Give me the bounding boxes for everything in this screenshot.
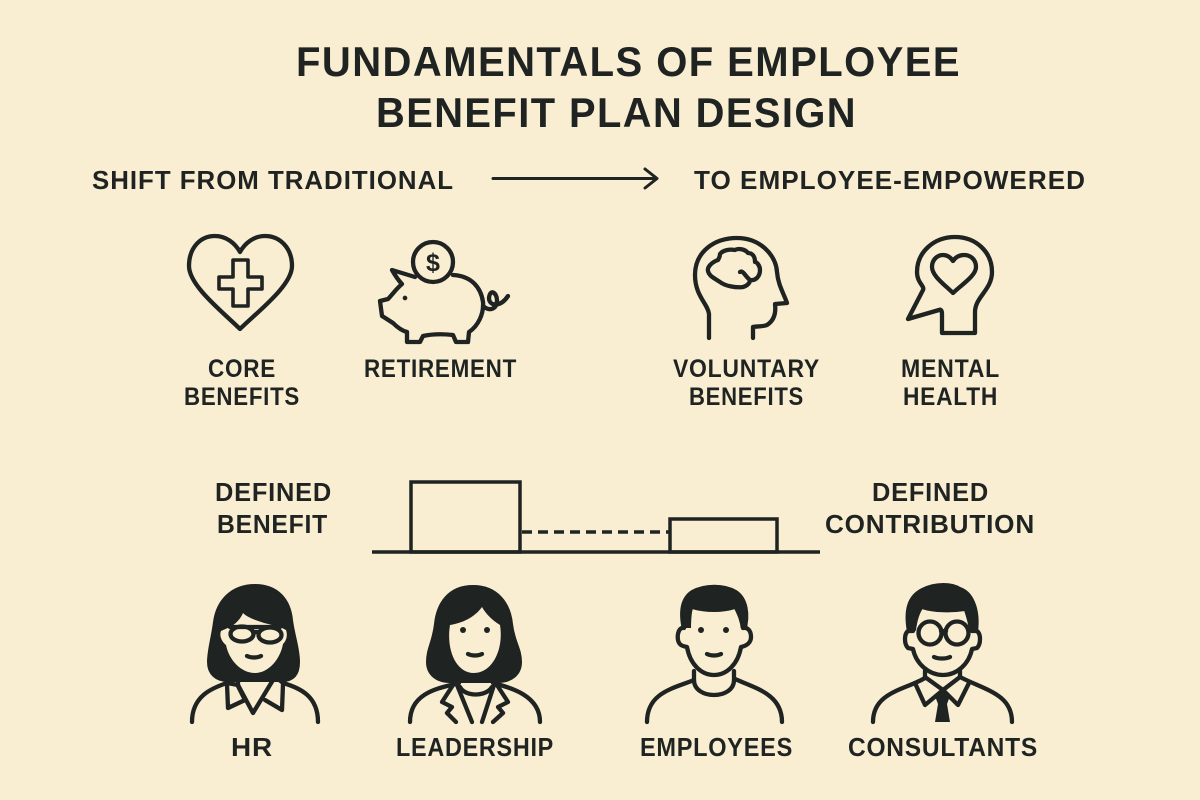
label: mental health: [901, 355, 1000, 411]
icon: heart with medical cross: [189, 236, 292, 329]
label: defined contribution: CONTRIBUTION: [825, 509, 1035, 539]
label: core benefits: BENEFITS: [184, 383, 300, 411]
label: voluntary benefits: [673, 355, 820, 411]
icon: piggy bank with coin: $: [426, 249, 440, 277]
title: [296, 38, 961, 136]
label: retirement: RETIREMENT: [364, 355, 517, 383]
title: FUNDAMENTALS OF EMPLOYEE: [296, 38, 961, 85]
panel: hr: [192, 585, 318, 762]
panel: consultants: [848, 584, 1038, 762]
label: defined contribution: [825, 477, 1035, 539]
panel: voluntary benefits: [673, 238, 820, 411]
label: consultants: CONSULTANTS: [848, 732, 1038, 762]
panel: mental health: [901, 237, 1000, 411]
label: defined benefit: [215, 477, 332, 539]
panel: retirement: [364, 242, 517, 383]
chart: defined benefit to defined contribution bars: [372, 482, 820, 552]
panel: employees: [640, 586, 793, 762]
label: voluntary benefits: BENEFITS: [689, 383, 804, 411]
label: mental health: MENTAL: [901, 355, 1000, 383]
heading: to employee-empowered: TO EMPLOYEE-EMPOWERED: [694, 165, 1086, 195]
label: core benefits: [184, 355, 300, 411]
label: core benefits: CORE: [208, 355, 276, 383]
panel: core benefits: [184, 236, 300, 411]
icon: head with brain: [695, 238, 787, 338]
label: voluntary benefits: VOLUNTARY: [673, 355, 820, 383]
panel: leadership: [396, 586, 554, 762]
icon: piggy bank with coin: [380, 242, 508, 342]
heading: shift from traditional: SHIFT FROM TRADITIONAL: [92, 165, 454, 195]
label: leadership: LEADERSHIP: [396, 732, 554, 762]
icon: man: [647, 586, 782, 722]
icon: woman with glasses: [192, 585, 318, 722]
icon: woman in blazer: [410, 586, 540, 722]
label: defined benefit: BENEFIT: [217, 509, 328, 539]
label: defined benefit: DEFINED: [215, 477, 332, 507]
label: hr: HR: [231, 732, 273, 762]
arrow: traditional to employee-empowered: [493, 169, 657, 188]
title: BENEFIT PLAN DESIGN: [376, 89, 857, 136]
label: defined contribution: DEFINED: [872, 477, 989, 507]
label: mental health: HEALTH: [903, 383, 998, 411]
icon: man with glasses and tie: [873, 584, 1012, 722]
label: employees: EMPLOYEES: [640, 732, 793, 762]
icon: head with heart: [908, 237, 992, 333]
